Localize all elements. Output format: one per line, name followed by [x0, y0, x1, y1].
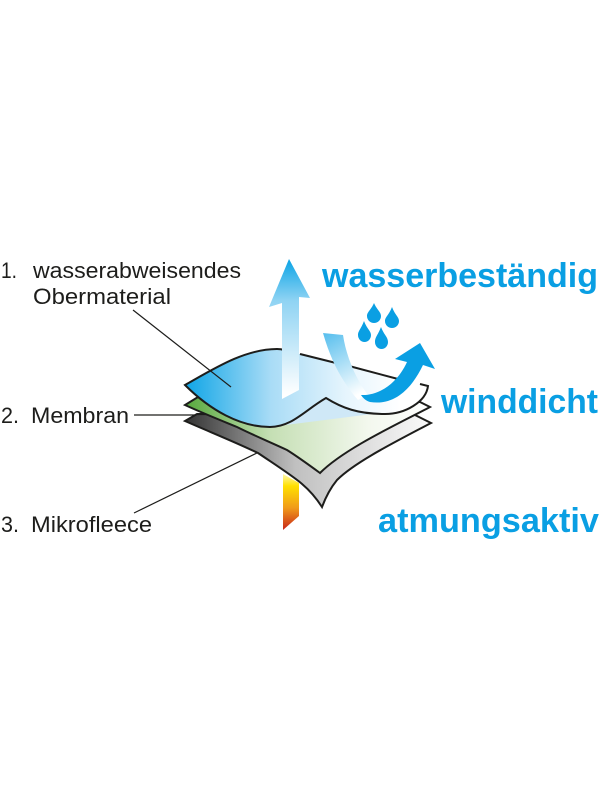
arrow: wind in [323, 333, 368, 400]
label: wasserabweisendes Obermaterial: Obermaterial [33, 284, 171, 309]
label: Mikrofleece: Mikrofleece [31, 512, 152, 537]
heading: wasserbeständig: wasserbeständig [321, 257, 598, 295]
layer: Obermaterial [185, 349, 428, 427]
leader line 3 [134, 453, 257, 513]
label: wasserabweisendes Obermaterial: wasserabweisendes [32, 258, 241, 283]
leader line 1 [133, 310, 231, 387]
arrow: vapour up [269, 259, 310, 399]
layer: Mikrofleece [185, 414, 431, 507]
pale shadow of the top layer [270, 398, 372, 427]
layer outline [185, 349, 428, 427]
heading: atmungsaktiv: atmungsaktiv [378, 502, 599, 540]
label: Membran: 2. [1, 403, 19, 428]
label: wasserabweisendes Obermaterial: 1. [1, 258, 17, 283]
icon: water drops [358, 303, 399, 349]
layer: Membran [185, 397, 430, 473]
label: Mikrofleece: 3. [1, 512, 19, 537]
heat arrow [283, 474, 299, 530]
label: wasserabweisendes Obermaterial [1, 258, 241, 309]
leader line 2 [134, 414, 195, 416]
label: Membran: Membran [31, 403, 129, 428]
arrow: wind out [361, 343, 435, 403]
heading: winddicht: winddicht [440, 383, 598, 421]
